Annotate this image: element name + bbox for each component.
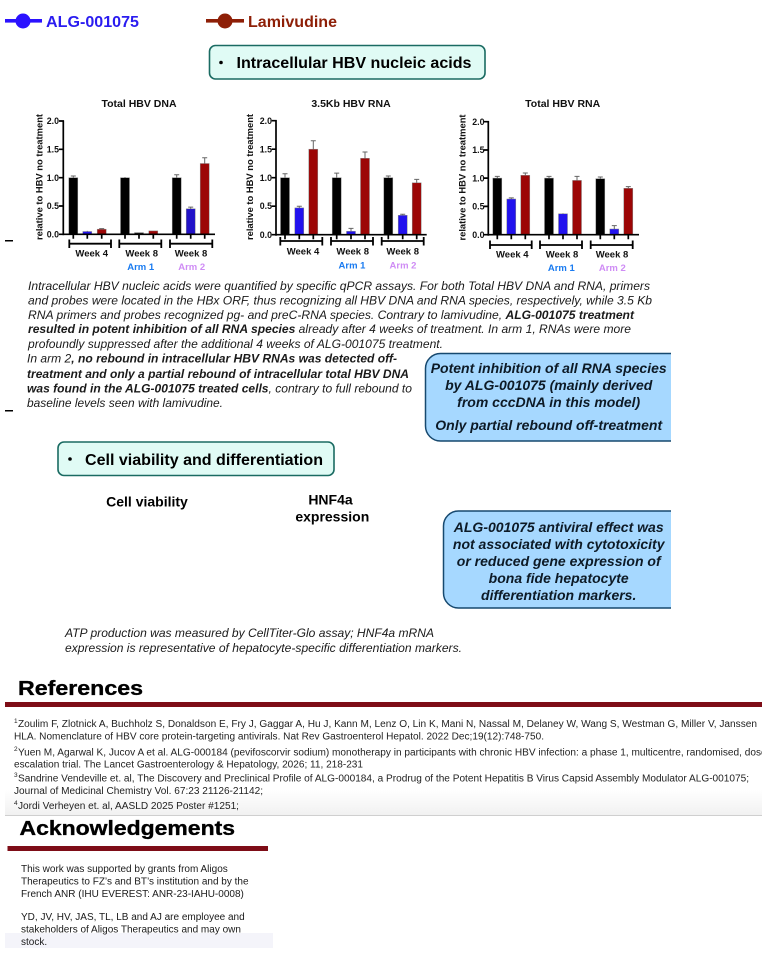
label: HNF4a expression — [295, 492, 369, 525]
chart: Total HBV RNA: Week 8 — [596, 250, 628, 260]
callout: potent inhibition: Only partial rebound off-treatment — [435, 417, 663, 433]
text block: qPCR methods and results: RNA primers and probes recognized pg- and preC-RNA species. Contrary to lamivudine, ALG-001075 treatment — [28, 308, 635, 322]
chart: Total HBV RNA: 0.5 — [472, 202, 485, 212]
chart: 3.5Kb HBV RNA: Arm 1 — [339, 260, 366, 272]
reference 4: 4 — [14, 800, 18, 807]
callout: potent inhibition: from cccDNA in this model) — [457, 394, 641, 410]
reference 2: escalation trial. The Lancet Gastroenterology & Hepatology, 2026; 11, 218-231 — [14, 760, 363, 770]
chart: Total HBV DNA: 1.0 — [47, 173, 59, 183]
chart: 3.5Kb HBV RNA: Week 8 — [386, 246, 419, 258]
chart: 3.5Kb HBV RNA: 1.5 — [260, 144, 272, 154]
chart: Total HBV DNA — [34, 98, 215, 273]
heading: Cell viability and differentiation — [58, 442, 334, 476]
callout: potent inhibition: by ALG-001075 (mainly derived — [445, 377, 653, 393]
reference 1: 1 — [14, 718, 18, 725]
chart: Total HBV DNA: 1.5 — [47, 144, 59, 154]
text block: acknowledgements: stock. — [21, 937, 47, 948]
chart: 3.5Kb HBV RNA — [244, 98, 427, 272]
label: Cell viability: Cell viability — [106, 494, 188, 510]
chart: Total HBV RNA — [456, 98, 639, 274]
callout: no cytotoxicity: ALG-001075 antiviral effect was — [453, 519, 664, 535]
reference 3 — [14, 772, 749, 797]
reference 4: Jordi Verheyen et. al, AASLD 2025 Poster #1251; — [18, 801, 239, 812]
text block: arm 2 results: baseline levels seen with lamivudine. — [27, 396, 223, 410]
chart: Total HBV RNA: 2.0 — [472, 117, 485, 127]
chart: Total HBV DNA: Arm 1 — [127, 262, 155, 273]
callout: no cytotoxicity: differentiation markers. — [481, 587, 636, 603]
reference 2: 2 — [14, 746, 18, 753]
chart: Total HBV DNA: Total HBV DNA — [101, 98, 177, 110]
bars: 3.5Kb HBV RNA — [280, 149, 421, 235]
heading: Cell viability and differentiation: Cell viability and differentiation — [85, 452, 323, 469]
chart: Total HBV RNA: Total HBV RNA — [525, 98, 601, 110]
chart: Total HBV DNA: Week 4 — [75, 248, 109, 260]
heading: Intracellular HBV nucleic acids — [210, 46, 485, 79]
text block: arm 2 results: In arm 2, no rebound in intracellular HBV RNAs was detected off- — [27, 352, 397, 366]
callout: no cytotoxicity: or reduced gene expression of — [457, 553, 662, 569]
chart: 3.5Kb HBV RNA: 0.0 — [260, 230, 272, 240]
callout: potent inhibition — [426, 354, 688, 441]
text block: acknowledgements: This work was supported by grants from Aligos — [21, 864, 228, 875]
chart: Total HBV DNA: 0.0 — [47, 230, 59, 240]
chart: 3.5Kb HBV RNA: 1.0 — [260, 173, 272, 183]
chart: Total HBV RNA: 1.5 — [472, 145, 485, 155]
text block: assay note: ATP production was measured by CellTiter-Glo assay; HNF4a mRNA — [64, 626, 434, 640]
heading: Intracellular HBV nucleic acids: Intracellular HBV nucleic acids — [236, 55, 472, 72]
text block: acknowledgements: YD, JV, HV, JAS, TL, LB and AJ are employee and — [21, 912, 245, 923]
heading: References: References — [18, 678, 143, 700]
text block: assay note: expression is representative of hepatocyte-specific differentiation markers. — [65, 641, 462, 655]
callout: no cytotoxicity — [444, 511, 688, 608]
label: HNF4a expression: HNF4a — [308, 492, 353, 508]
reference 3: Sandrine Vendeville et. al, The Discovery and Preclinical Profile of ALG-000184, a Prodrug of the Potent Hepatitis B Virus Capsid Assembly Modulator ALG-001075; — [18, 774, 749, 784]
chart: 3.5Kb HBV RNA: Week 4 — [287, 246, 320, 258]
chart: 3.5Kb HBV RNA: Arm 2 — [390, 260, 416, 272]
chart: Total HBV DNA: relative to HBV no treatment — [34, 114, 44, 240]
chart: 3.5Kb HBV RNA: relative to HBV no treatment — [244, 114, 255, 240]
chart: Total HBV DNA: Week 8 — [175, 248, 207, 260]
chart: 3.5Kb HBV RNA: Week 8 — [336, 246, 369, 258]
bars: Total HBV DNA — [69, 164, 209, 234]
label: HNF4a expression: expression — [295, 509, 369, 525]
text block: arm 2 results: was found in the ALG-001075 treated cells, contrary to full rebound to — [27, 382, 412, 396]
chart: Total HBV RNA: Arm 1 — [548, 263, 575, 274]
chart: Total HBV DNA: Arm 2 — [178, 262, 205, 273]
text block: arm 2 results: treatment and only a partial rebound of intracellular total HBV DNA — [27, 367, 409, 381]
bars: Total HBV RNA — [493, 175, 633, 235]
chart: Total HBV RNA: relative to HBV no treatment — [456, 114, 468, 241]
reference 3: Journal of Medicinal Chemistry Vol. 67:23 21126-21142; — [14, 786, 263, 797]
reference 1 — [14, 718, 757, 742]
chart: Total HBV DNA: 2.0 — [47, 116, 59, 126]
text block: assay note — [64, 626, 462, 655]
reference 3: 3 — [14, 772, 18, 779]
reference list — [14, 718, 770, 812]
callout: no cytotoxicity: bona fide hepatocyte — [489, 570, 629, 586]
chart: 3.5Kb HBV RNA: 3.5Kb HBV RNA — [311, 98, 391, 110]
text block: acknowledgements: Therapeutics to FZ’s and BT’s institution and by the — [21, 876, 249, 888]
reference 1: Zoulim F, Zlotnick A, Buchholz S, Donaldson E, Fry J, Gaggar A, Hu J, Kann M, Lenz O, Lin K, Mani N, Nassal M, Delaney W, Wang S, Westman G, Miller V, Janssen — [18, 719, 757, 730]
legend: ALG-001075 — [5, 14, 139, 31]
chart: Total HBV RNA: Week 4 — [496, 250, 529, 260]
chart: Total HBV RNA: 0.0 — [472, 230, 485, 240]
legend: ALG-001075: ALG-001075 — [46, 14, 139, 31]
text block: qPCR methods and results: and probes were located in the HBx ORF, thus recognizing all HBV DNA and RNA species, respectively, while 3.5 Kb — [28, 294, 652, 308]
chart: Total HBV RNA: Arm 2 — [599, 263, 626, 274]
reference 2: Yuen M, Agarwal K, Jucov A et al. ALG-000184 (pevifoscorvir sodium) monotherapy in participants with chronic HBV infection: a phase 1, multicentre, randomised, dose- — [18, 748, 770, 758]
text block: qPCR methods and results: profoundly suppressed after the additional 4 weeks of ALG-001075 treatment. — [27, 337, 443, 351]
text block: qPCR methods and results: resulted in potent inhibition of all RNA species already after 4 weeks of treatment. In arm 1, RNAs were more — [28, 322, 631, 336]
legend: Lamivudine: Lamivudine — [248, 14, 337, 31]
text block: qPCR methods and results: Intracellular HBV nucleic acids were quantified by specific qPCR assays. For both Total HBV DNA and RNA, primers — [28, 279, 650, 293]
heading: Acknowledgements: Acknowledgements — [20, 818, 235, 840]
callout: potent inhibition: Potent inhibition of all RNA species — [431, 360, 667, 376]
legend: Lamivudine — [206, 14, 337, 31]
text block: acknowledgements — [21, 864, 249, 948]
chart: 3.5Kb HBV RNA: 0.5 — [260, 201, 272, 211]
callout: no cytotoxicity: not associated with cytotoxicity — [453, 536, 666, 552]
chart: 3.5Kb HBV RNA: 2.0 — [260, 116, 272, 126]
chart: Total HBV DNA: Week 8 — [125, 248, 158, 260]
reference 2 — [14, 746, 770, 770]
chart: Total HBV DNA: 0.5 — [47, 201, 59, 211]
text block: qPCR methods and results — [27, 279, 652, 351]
chart: Total HBV RNA: Week 8 — [546, 250, 578, 260]
reference 1: HLA. Nomenclature of HBV core protein-targeting antivirals. Nat Rev Gastroenterol Hepatol. 2022 Dec;19(12):748-750. — [14, 732, 544, 742]
text block: arm 2 results — [27, 352, 412, 410]
text block: acknowledgements: French ANR (IHU EVEREST: ANR-23-IAHU-0008) — [21, 889, 244, 900]
chart: Total HBV RNA: 1.0 — [472, 174, 485, 184]
text block: acknowledgements: stakeholders of Aligos Therapeutics and may own — [21, 924, 241, 936]
